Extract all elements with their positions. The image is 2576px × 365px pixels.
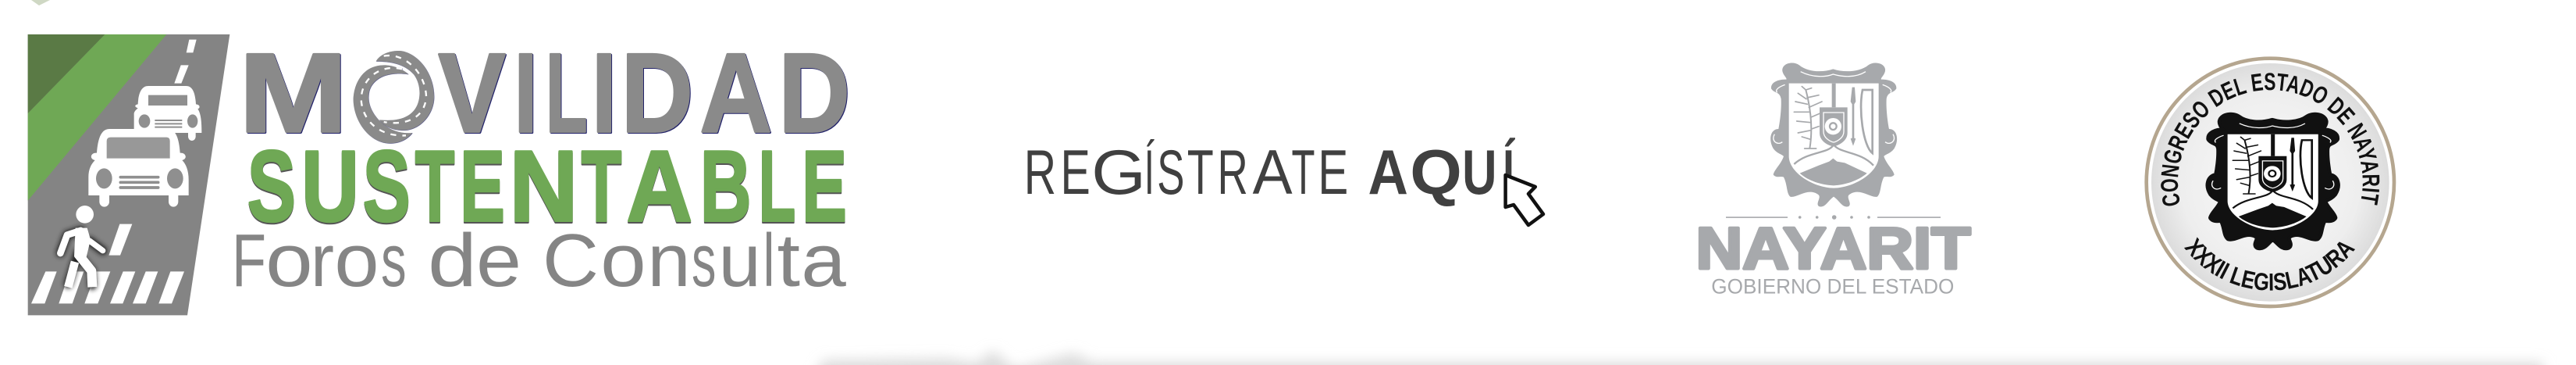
text: NAYARIT: NAYARIT (1695, 216, 1970, 281)
text: REGÍSTRATE: R (1024, 138, 1056, 208)
icon: pedestrian (60, 206, 103, 287)
heading: Foros de Consulta: d (428, 219, 477, 302)
heading: Foros de Consulta (232, 219, 846, 302)
heading: SUSTENTABLE: A (626, 130, 692, 242)
heading: Foros de Consulta: o (265, 219, 313, 302)
text: REGÍSTRATE: A (1253, 138, 1293, 208)
text: CONGRESO DEL ESTADO DE NAYARIT: CONGRESO DEL ESTADO DE NAYARIT (2161, 73, 2379, 206)
text: GOBIERNO DEL ESTADO: GOBIERNO DEL ESTADO (1711, 275, 1954, 299)
heading: MOVILIDAD: M (239, 30, 347, 156)
heading: Foros de Consulta: C (543, 219, 599, 302)
heading: Foros de Consulta: e (476, 219, 521, 302)
logo: Movilidad Sustentable (28, 30, 850, 315)
heading: Foros de Consulta: n (647, 219, 691, 302)
heading: Foros de Consulta: o (600, 219, 646, 302)
heading: SUSTENTABLE: B (700, 130, 751, 242)
heading: SUSTENTABLE: E (460, 130, 505, 242)
text: REGÍSTRATE: T (1187, 138, 1214, 208)
text: REGÍSTRATE: E (1060, 138, 1091, 208)
text: REGÍSTRATE: R (1218, 138, 1248, 208)
icon: congress coat of arms (2209, 116, 2336, 247)
lane dashes (109, 40, 197, 256)
text: XXXII LEGISLATURA: XXXII LEGISLATURA (2184, 237, 2356, 291)
heading: SUSTENTABLE: T (415, 130, 454, 242)
heading: Foros de Consulta: s (381, 219, 407, 302)
heading: SUSTENTABLE: U (301, 130, 359, 242)
text: REGÍSTRATE: S (1157, 138, 1184, 208)
heading: Foros de Consulta: F (232, 219, 266, 302)
crosswalk stripes (31, 271, 184, 303)
text: AQUÍ: U (1462, 138, 1497, 208)
logo: Congreso del Estado de Nayarit seal (2144, 56, 2396, 308)
icon: front car (88, 129, 189, 207)
text: AQUÍ: A (1368, 138, 1408, 208)
heading: Foros de Consulta: r (311, 219, 334, 302)
heading: MOVILIDAD (239, 30, 850, 156)
heading: MOVILIDAD: D (779, 30, 850, 156)
heading: MOVILIDAD: A (699, 30, 772, 156)
text: REGÍSTRATE (1024, 138, 1348, 208)
heading: MOVILIDAD: D (621, 30, 693, 156)
divider with dots (1726, 215, 1941, 220)
heading: Foros de Consulta: l (763, 219, 774, 302)
text: REGÍSTRATE: T (1291, 138, 1315, 208)
panel: road illustration (28, 34, 229, 315)
text: REGÍSTRATE: E (1318, 138, 1348, 208)
icon: mouse cursor (1506, 175, 1543, 225)
text: REGÍSTRATE: G (1091, 138, 1146, 208)
heading: MOVILIDAD: L (546, 30, 588, 156)
icon: state coat of arms (1770, 63, 1897, 206)
heading: SUSTENTABLE: S (363, 130, 411, 242)
heading: MOVILIDAD: V (439, 30, 506, 156)
heading: Foros de Consulta: t (777, 219, 800, 302)
text: AQUÍ (1368, 137, 1515, 208)
text: AQUÍ: Í (1503, 137, 1515, 208)
text: REGÍSTRATE: Í (1144, 138, 1155, 208)
heading: SUSTENTABLE: N (510, 130, 578, 242)
heading: Foros de Consulta: a (801, 219, 846, 302)
heading: SUSTENTABLE (247, 130, 847, 242)
heading: Foros de Consulta: s (692, 219, 716, 302)
icon: road ring letter O (354, 51, 434, 143)
text: AQUÍ: Q (1410, 138, 1462, 208)
heading: Foros de Consulta: u (718, 219, 761, 302)
icon: rear car (134, 86, 201, 141)
heading: MOVILIDAD: I (592, 30, 616, 156)
heading: SUSTENTABLE: E (802, 130, 847, 242)
heading: SUSTENTABLE: T (582, 130, 621, 242)
heading: SUSTENTABLE: L (759, 130, 795, 242)
heading: SUSTENTABLE: S (247, 130, 296, 242)
heading: MOVILIDAD: I (514, 30, 537, 156)
seal ring (2147, 59, 2394, 306)
logo: Gobierno de Nayarit (1695, 63, 1970, 298)
heading: Foros de Consulta: o (334, 219, 379, 302)
call to action: Regístrate aquí (1024, 137, 1543, 225)
